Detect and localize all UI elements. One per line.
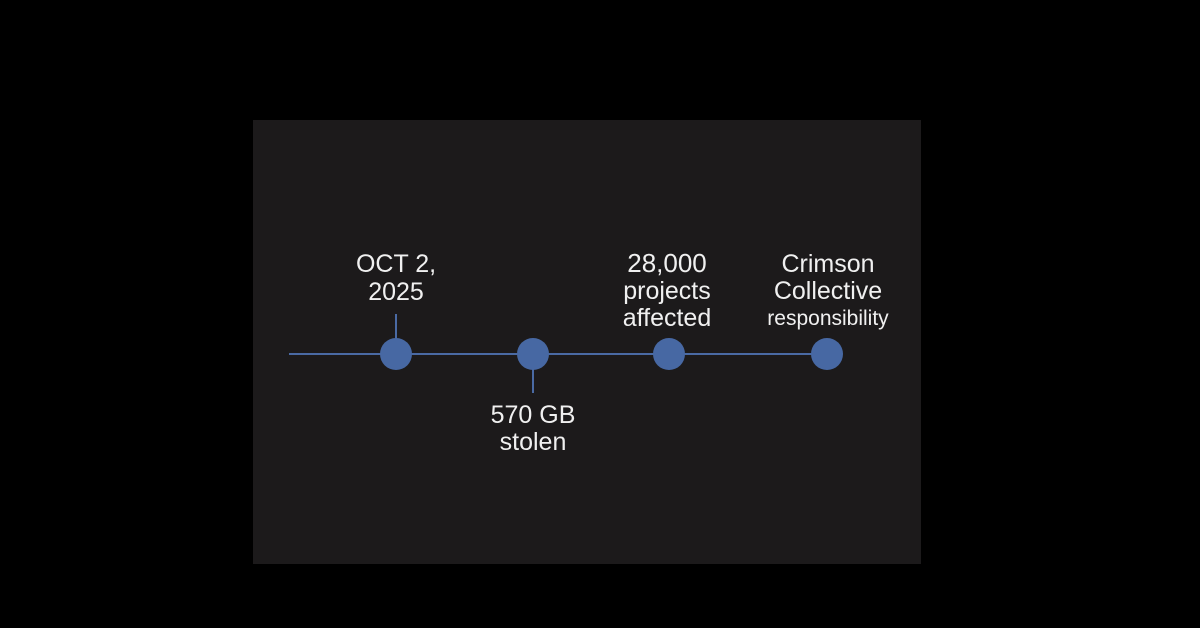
marker: Crimson Collective responsibility — [767, 250, 889, 370]
marker: 570 GB stolen — [491, 338, 575, 456]
marker: 570 GB stolen: stolen — [500, 428, 566, 456]
marker: 28,000 projects affected: 28,000 — [627, 248, 707, 278]
marker: 28,000 projects affected: projects — [623, 277, 711, 305]
marker: Crimson Collective responsibility: Crimson — [781, 250, 875, 278]
timeline axis line — [289, 353, 828, 355]
marker: 28,000 projects affected — [623, 248, 711, 370]
marker: Crimson Collective responsibility: responsibility — [767, 307, 889, 330]
panel: timeline card — [253, 120, 921, 564]
marker: OCT 2, 2025: 2025 — [368, 278, 424, 306]
marker: 28,000 projects affected: affected — [623, 304, 711, 332]
marker: OCT 2, 2025 — [356, 250, 436, 370]
timeline chart — [289, 248, 889, 456]
marker: OCT 2, 2025: OCT 2, — [356, 250, 436, 278]
marker: Crimson Collective responsibility: Collective — [774, 277, 882, 305]
marker: 570 GB stolen: 570 GB — [491, 401, 575, 429]
